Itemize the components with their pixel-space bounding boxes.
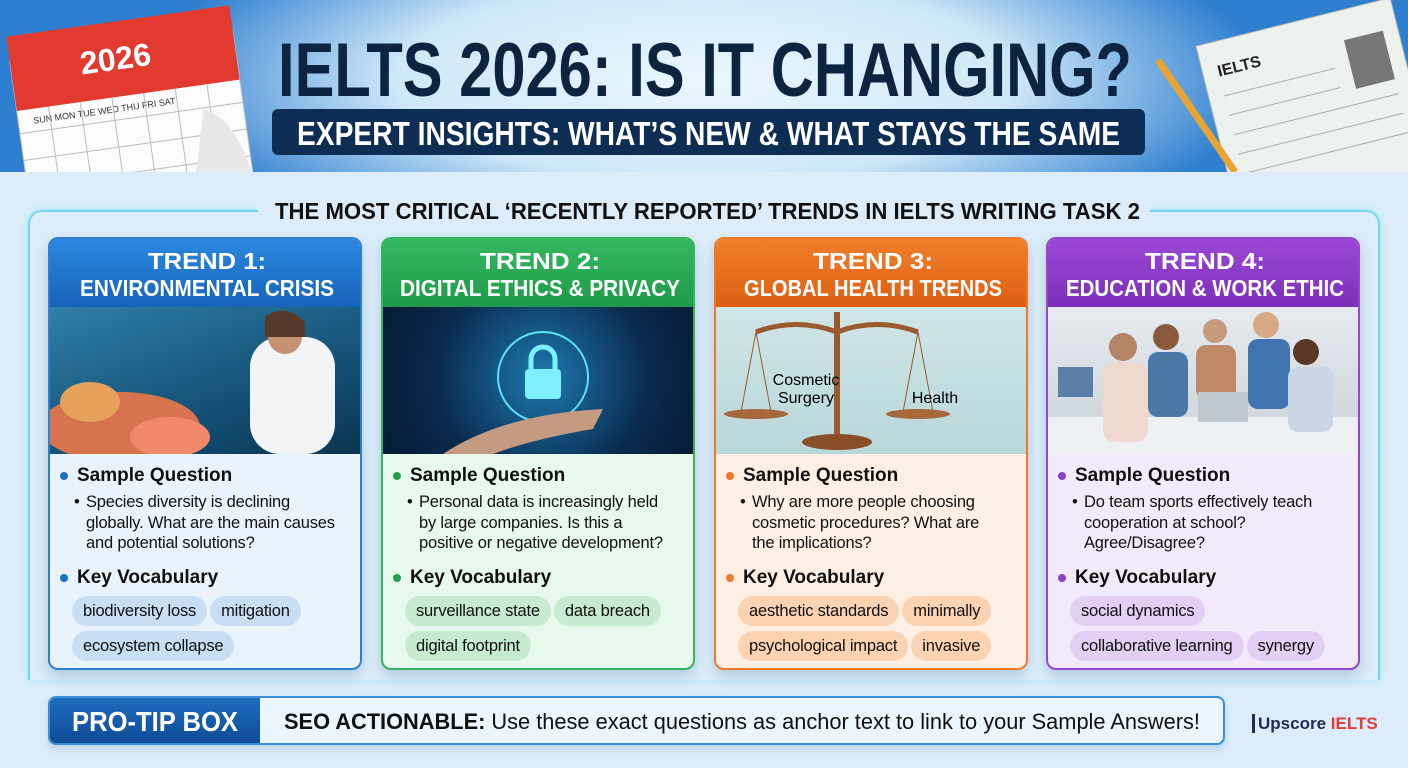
key vocabulary 3: minimally	[913, 602, 980, 620]
heading: trend 3: TREND 3:	[813, 248, 933, 274]
key vocabulary 3: Key Vocabulary	[743, 567, 884, 588]
section heading: THE MOST CRITICAL ‘RECENTLY REPORTED’ TRENDS IN IELTS WRITING TASK 2	[275, 198, 1140, 224]
key vocabulary 3: aesthetic standards	[749, 602, 888, 620]
key vocabulary 1: Key Vocabulary	[77, 567, 218, 588]
icon: calendar: 2026	[78, 36, 153, 81]
key vocabulary 4	[1058, 567, 1325, 661]
icon: calendar	[6, 5, 254, 172]
sample question 2: Sample Question	[410, 465, 565, 486]
key vocabulary 2: data breach	[565, 602, 650, 620]
sample question 1: and potential solutions?	[86, 534, 255, 552]
sample question 2	[393, 465, 663, 552]
sample question 2: by large companies. Is this a	[419, 514, 622, 532]
key vocabulary 2: digital footprint	[416, 637, 520, 655]
sample question 1	[60, 465, 335, 552]
sample question 3: Why are more people choosing	[752, 493, 975, 511]
heading: trend 1: TREND 1:	[148, 248, 266, 274]
icon: IELTS answer sheet and pencil	[1155, 0, 1408, 172]
sample question 4: Sample Question	[1075, 465, 1230, 486]
sample question 3: the implications?	[752, 534, 872, 552]
image: coral reef scientist	[50, 307, 360, 454]
heading: trend 1: ENVIRONMENTAL CRISIS	[80, 275, 334, 301]
image: digital lock	[383, 307, 693, 454]
sample question 4: cooperation at school?	[1084, 514, 1246, 532]
image: balance scale	[716, 307, 1026, 454]
logo: Upscore IELTS: Upscore IELTS	[1258, 714, 1378, 733]
sample question 4: Agree/Disagree?	[1084, 534, 1205, 552]
key vocabulary 3	[726, 567, 991, 661]
heading: trend 2	[383, 239, 693, 307]
key vocabulary 1: ecosystem collapse	[83, 637, 223, 655]
key vocabulary 2	[393, 567, 661, 661]
key vocabulary 2: surveillance state	[416, 602, 540, 620]
heading: trend 3	[716, 239, 1026, 307]
panel: trend 4	[1046, 237, 1360, 670]
panel: trend 1	[48, 237, 362, 670]
icon: IELTS answer sheet and pencil: IELTS	[1216, 53, 1263, 80]
heading: trend 4	[1048, 239, 1358, 307]
key vocabulary 2: Key Vocabulary	[410, 567, 551, 588]
key vocabulary 3: psychological impact	[749, 637, 897, 655]
sample question 4	[1058, 465, 1312, 552]
header banner	[0, 0, 1408, 172]
sample question 2: Personal data is increasingly held	[419, 493, 658, 511]
image: balance scale: Surgery	[778, 390, 834, 407]
pro-tip box	[48, 696, 1225, 745]
section frame	[28, 210, 1380, 680]
key vocabulary 1: mitigation	[221, 602, 290, 620]
sample question 1: Sample Question	[77, 465, 232, 486]
image: balance scale: Health	[912, 390, 958, 407]
sample question 4: Do team sports effectively teach	[1084, 493, 1312, 511]
key vocabulary 1	[60, 567, 301, 661]
key vocabulary 1: biodiversity loss	[83, 602, 196, 620]
panel: trend 3	[714, 237, 1028, 670]
pro-tip text: SEO ACTIONABLE: Use these exact questions as anchor text to link to your Sample Answers!	[284, 709, 1200, 734]
sample question 3: Sample Question	[743, 465, 898, 486]
panel: trend 2	[381, 237, 695, 670]
image: students collaborating	[1048, 307, 1358, 454]
icon: calendar: SUN MON TUE WED THU FRI SAT	[33, 96, 177, 126]
key vocabulary 4: Key Vocabulary	[1075, 567, 1216, 588]
sample question 3	[726, 465, 979, 552]
heading: trend 4: TREND 4:	[1145, 248, 1265, 274]
sample question 2: positive or negative development?	[419, 534, 663, 552]
key vocabulary 3: invasive	[922, 637, 980, 655]
pro-tip label: PRO-TIP BOX	[72, 706, 238, 737]
image: balance scale: Cosmetic	[773, 372, 839, 389]
pro-tip label	[50, 698, 260, 743]
sample question 3: cosmetic procedures? What are	[752, 514, 979, 532]
key vocabulary 4: social dynamics	[1081, 602, 1194, 620]
key vocabulary 4: collaborative learning	[1081, 637, 1233, 655]
sample question 1: globally. What are the main causes	[86, 514, 335, 532]
key vocabulary 4: synergy	[1258, 637, 1314, 655]
heading: trend 1	[50, 239, 360, 307]
sample question 1: Species diversity is declining	[86, 493, 290, 511]
heading: trend 2: TREND 2:	[480, 248, 600, 274]
